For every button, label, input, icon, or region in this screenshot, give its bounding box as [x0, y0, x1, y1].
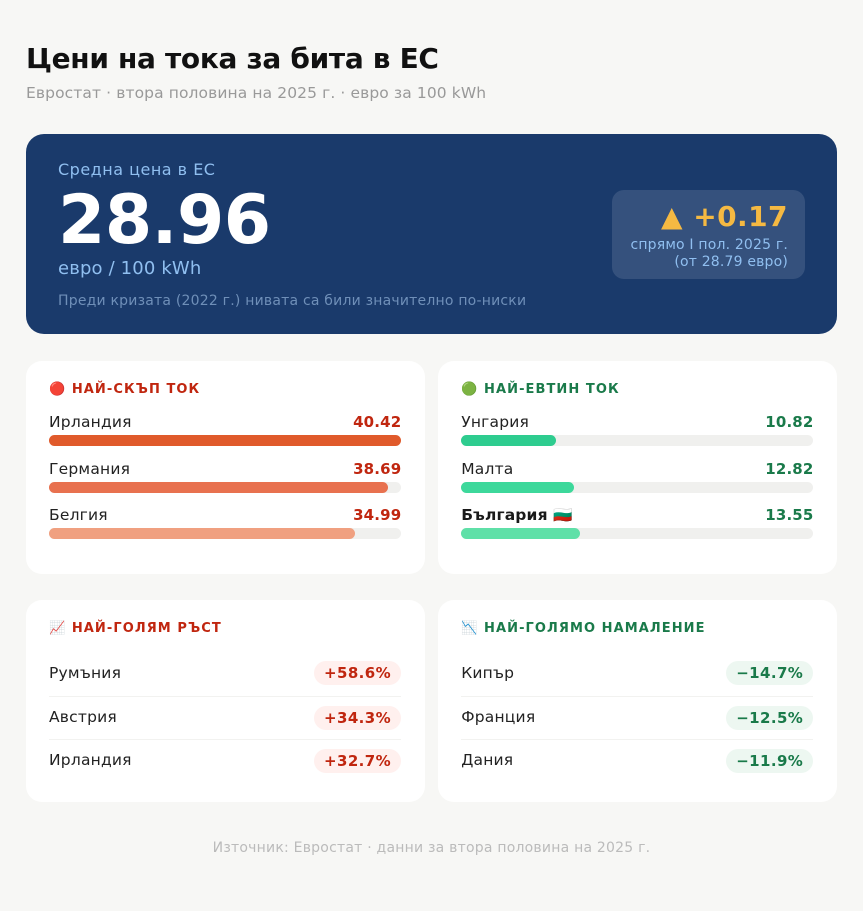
change: Румъния: +58.6%: [324, 664, 391, 682]
change caption: (от 28.79 евро): [674, 254, 788, 270]
row: Малта: Малта: [461, 460, 514, 478]
change: Ирландия: +32.7%: [324, 752, 391, 770]
change caption: [630, 237, 788, 270]
change value: ▲ +0.17: [661, 200, 788, 233]
bar: Малта: [461, 482, 813, 493]
heading: 📉 НАЙ-ГОЛЯМО НАМАЛЕНИЕ: [461, 621, 706, 636]
change: Франция: −12.5%: [736, 709, 803, 727]
row: Германия: Германия: [49, 460, 130, 478]
change: Австрия: [314, 706, 401, 730]
row: Унгария: Унгария: [461, 413, 529, 431]
hero unit: евро / 100 kWh: [58, 258, 201, 279]
hero label: Средна цена в ЕС: [58, 160, 215, 179]
row: Ирландия: Ирландия: [49, 413, 132, 431]
change: Ирландия: [314, 749, 401, 773]
change caption: спрямо I пол. 2025 г.: [630, 237, 788, 253]
title: Цени на тока за бита в ЕС: [26, 42, 439, 75]
panel: cheapest electricity: [438, 361, 837, 574]
bar: Унгария: [461, 435, 813, 446]
value: Унгария: 10.82: [765, 413, 813, 431]
panel: EU average price hero: [26, 134, 837, 334]
subtitle: Евростат · втора половина на 2025 г. · евро за 100 kWh: [26, 84, 486, 102]
row: Австрия: Австрия: [49, 708, 117, 726]
hero number: 28.96: [58, 181, 271, 260]
hero note: Преди кризата (2022 г.) нивата са били значително по-ниски: [58, 293, 526, 309]
heading: 📈 НАЙ-ГОЛЯМ РЪСТ: [49, 621, 222, 636]
value: Германия: 38.69: [353, 460, 401, 478]
change: Дания: [726, 749, 813, 773]
row: Франция: Франция: [461, 708, 535, 726]
bar: Белгия: [49, 528, 401, 539]
change badge: [612, 190, 805, 279]
panel: biggest increase: [26, 600, 425, 802]
footer source: Източник: Евростат · данни за втора половина на 2025 г.: [213, 840, 650, 856]
heading: 🔴 НАЙ-СКЪП ТОК: [49, 382, 200, 397]
row: Белгия: Белгия: [49, 506, 108, 524]
change: Румъния: [314, 661, 401, 685]
change: Дания: −11.9%: [736, 752, 803, 770]
value: Малта: 12.82: [765, 460, 813, 478]
bar: Ирландия: [49, 435, 401, 446]
change: Австрия: +34.3%: [324, 709, 391, 727]
value: Ирландия: 40.42: [353, 413, 401, 431]
panel: biggest decrease: [438, 600, 837, 802]
row: България: България 🇧🇬: [461, 506, 573, 524]
value: България: 13.55: [765, 506, 813, 524]
bar: Германия: [49, 482, 401, 493]
heading: 🟢 НАЙ-ЕВТИН ТОК: [461, 382, 620, 397]
change: Кипър: −14.7%: [736, 664, 803, 682]
panel: most expensive electricity: [26, 361, 425, 574]
bar: България: [461, 528, 813, 539]
row: Румъния: Румъния: [49, 664, 121, 682]
row: Дания: Дания: [461, 751, 513, 769]
row: Ирландия: Ирландия: [49, 751, 132, 769]
value: Белгия: 34.99: [353, 506, 401, 524]
row: Кипър: Кипър: [461, 664, 514, 682]
change: Кипър: [726, 661, 813, 685]
change: Франция: [726, 706, 813, 730]
